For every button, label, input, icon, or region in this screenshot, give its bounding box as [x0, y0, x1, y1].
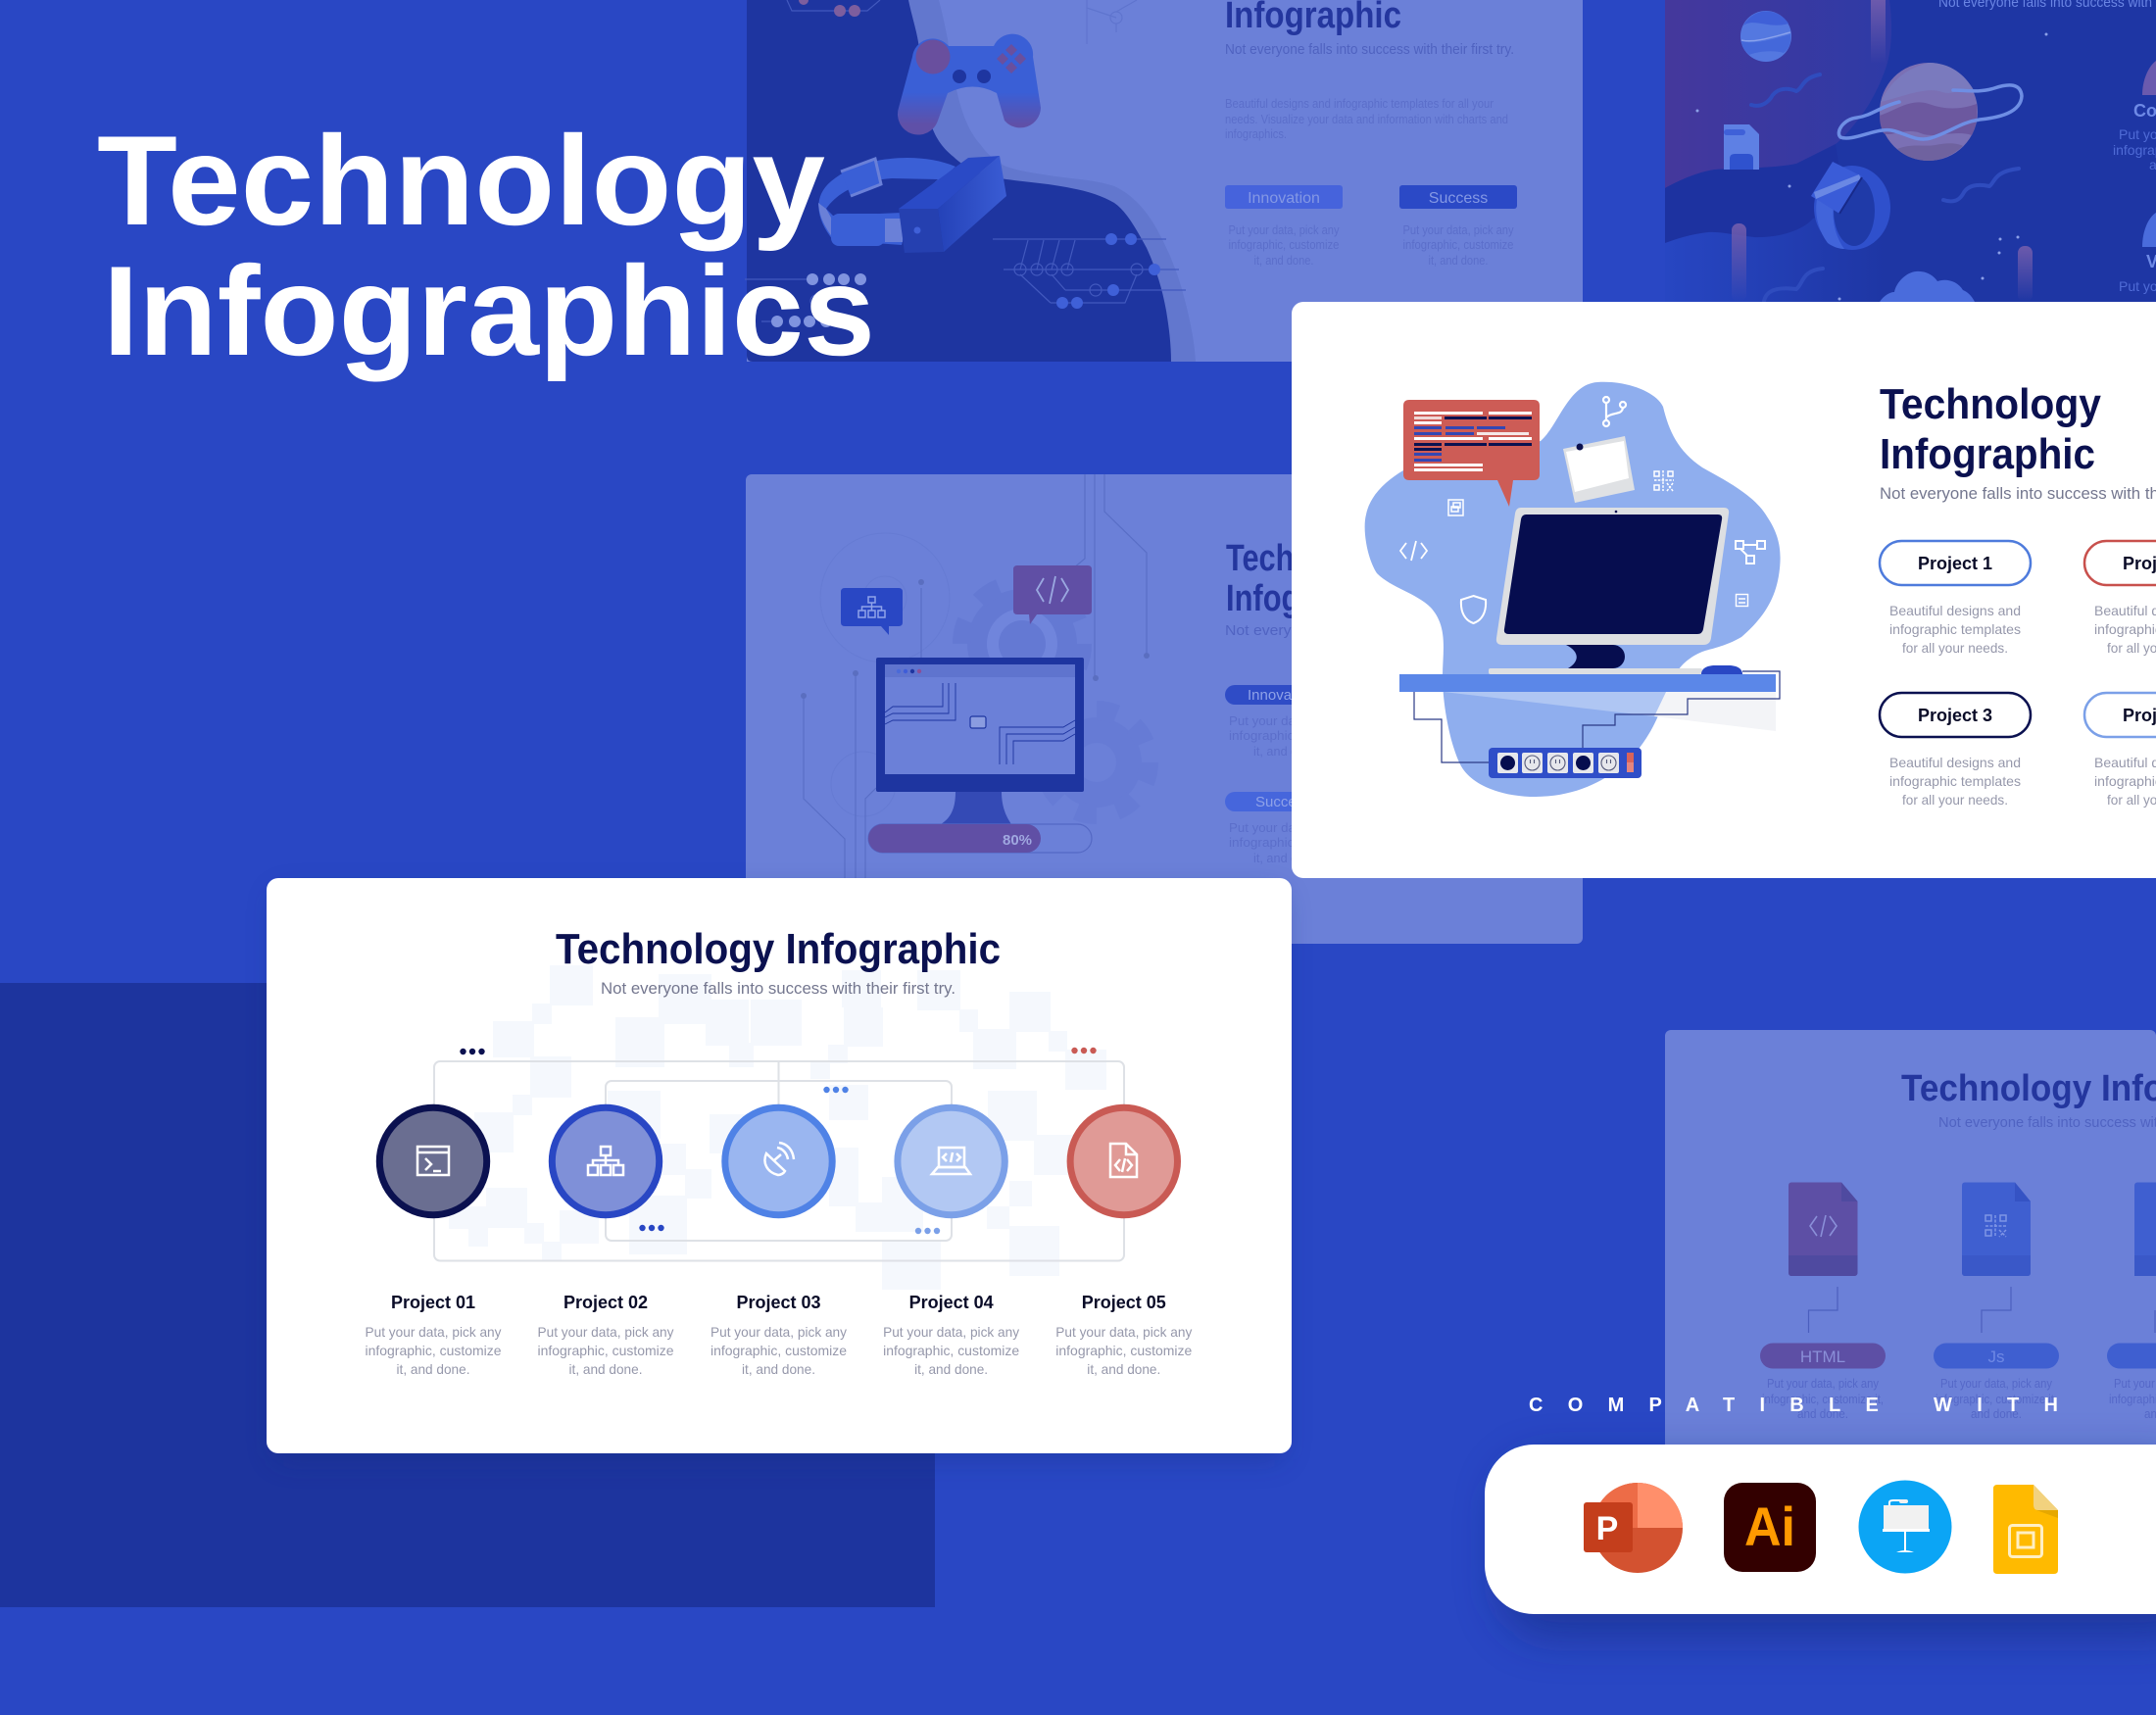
- column text: Put your data, pick any: [1767, 1376, 1879, 1391]
- column text: infographic, customize it,: [1762, 1392, 1884, 1406]
- column text: Put your data, pick any: [1403, 222, 1514, 237]
- compatible with label: COMPATIBLE WITH: [1529, 1395, 2058, 1416]
- faded text block: [1229, 820, 1362, 865]
- paragraph: [1225, 97, 1508, 141]
- pill: Project 4: [2084, 693, 2156, 737]
- dots: navy: [460, 1049, 485, 1054]
- text: Project 3: for all your needs.: [1902, 792, 2008, 808]
- speech bubble with code: [1403, 400, 1540, 507]
- icon: Keynote: [1858, 1480, 1952, 1574]
- pill: Project 1: [1880, 541, 2031, 585]
- blob: [1365, 382, 1781, 797]
- text: Project 3: [1889, 755, 2021, 808]
- subheading: Not everyone falls into success with their first try.: [601, 979, 956, 998]
- pill: Success: [1225, 792, 1352, 811]
- heading: Technology: [1226, 538, 1393, 579]
- text: Project 4: [2094, 755, 2156, 808]
- dark backdrop block: [0, 983, 935, 1607]
- dots: blue: [823, 1087, 849, 1093]
- icon: Js file: [1962, 1182, 2031, 1276]
- pill: HTML: HTML: [1800, 1348, 1845, 1366]
- icon: document: [1448, 500, 1463, 515]
- heading: Technology: [1880, 380, 2101, 428]
- circuit dots: [745, 0, 1186, 327]
- icon: floppy disk: [1724, 124, 1759, 170]
- label: Project 05: Project 05: [1082, 1293, 1166, 1312]
- icon: paper card and ring: [1811, 162, 1890, 250]
- icon: small planet: [1740, 11, 1791, 62]
- bars: [1732, 0, 2033, 302]
- label: Project 05: [1055, 1293, 1193, 1377]
- title: Infographics: [103, 239, 875, 382]
- text: Project 2: [2094, 603, 2156, 656]
- label: Project 01: it, and done.: [396, 1361, 470, 1377]
- pill: Innovation: [1225, 685, 1352, 705]
- lower wave: [1665, 144, 1842, 243]
- label: Project 05: infographic, customize: [1055, 1343, 1193, 1358]
- button: Success: [1399, 185, 1517, 209]
- progress bar 80%: 80%: [1003, 832, 1032, 849]
- icon: network: [1736, 541, 1765, 564]
- paragraph: Beautiful designs and infographic templates for all your: [1225, 97, 1494, 111]
- icon: cloud: [1880, 271, 1975, 302]
- text: Project 1: Beautiful designs and: [1889, 603, 2021, 618]
- label: Project 05: Put your data, pick any: [1055, 1324, 1192, 1340]
- person silhouette: [747, 0, 1171, 362]
- pill: HTML: [1760, 1343, 1886, 1368]
- circle: Project 04: [898, 1107, 1004, 1215]
- panel: faded file types slide: [1665, 1030, 2156, 1451]
- pill: Project 3: Project 3: [1918, 706, 1992, 725]
- label: Project 03: [710, 1293, 847, 1377]
- pill: Js: [1934, 1343, 2059, 1368]
- label: Project 01: infographic, customize: [365, 1343, 502, 1358]
- pill: third: [2107, 1343, 2156, 1368]
- label: Project 02: Project 02: [564, 1293, 648, 1312]
- desk: [1399, 674, 1776, 692]
- panel: faded gaming slide: [745, 0, 1583, 362]
- label: Project 04: [883, 1293, 1019, 1377]
- text: Project 1: [1889, 603, 2021, 656]
- desk shadow: [1444, 692, 1666, 716]
- wires: [1414, 671, 1780, 762]
- stars: [1695, 33, 2048, 300]
- lower glow: [1665, 201, 1960, 302]
- heading: Infographic: [1226, 578, 1391, 619]
- icon: big planet with ring: [1838, 63, 2022, 161]
- label: Project 02: it, and done.: [568, 1361, 643, 1377]
- icon: gamepad: [898, 34, 1041, 135]
- icon: smart band and VR device: [818, 156, 1006, 253]
- column text: infographic, customize: [1229, 237, 1339, 252]
- label: Project 04: Put your data, pick any: [883, 1324, 1019, 1340]
- heading: [1880, 380, 2101, 478]
- label: Project 02: [537, 1293, 674, 1377]
- label: Project 03: Project 03: [736, 1293, 821, 1312]
- icon: Illustrator: Ai: [1744, 1495, 1795, 1557]
- dots: light blue: [915, 1228, 940, 1234]
- monitor: [1489, 508, 1729, 674]
- column text: it, and done.: [1254, 253, 1313, 268]
- label: Project 02: infographic, customize: [537, 1343, 674, 1358]
- subheading: Not everyone falls into success with their first try.: [1225, 41, 1514, 58]
- faded text block: infographic, customize: [1229, 835, 1361, 850]
- pill: Innovation: Innovation: [1248, 687, 1315, 704]
- pill: Success: Success: [1255, 794, 1311, 810]
- button: Innovation: Innovation: [1248, 190, 1320, 207]
- circuit lines: [801, 474, 1150, 878]
- heading: [1226, 538, 1393, 619]
- monitor: [876, 658, 1084, 824]
- icon: shield: [1461, 596, 1486, 623]
- faded text block: [1229, 713, 1362, 759]
- text: Project 1: infographic templates: [1889, 621, 2021, 637]
- faded text block: Put your data, pick any: [1229, 713, 1362, 728]
- label: Project 01: [365, 1293, 502, 1377]
- label: Project 01: Project 01: [391, 1293, 475, 1312]
- panel: white card with five projects: [267, 878, 1292, 1453]
- icon: HTML file: [1788, 1182, 1858, 1276]
- icon: PowerPoint: [1584, 1483, 1683, 1573]
- panel: white card with computer: [1292, 302, 2156, 878]
- gear: main: [961, 583, 1083, 705]
- pill: Project 3: [1880, 693, 2031, 737]
- faded text block: it, and done.: [1253, 744, 1322, 759]
- faded icons at right: [2142, 61, 2156, 247]
- connectors: [1809, 1287, 2155, 1333]
- label: Project 04: infographic, customize: [883, 1343, 1019, 1358]
- outline gears: [820, 533, 950, 816]
- pill: Project 1: Project 1: [1918, 554, 1992, 573]
- icon: branch: [1603, 397, 1626, 426]
- illustration: computer on blob: [1365, 382, 1781, 797]
- column text: Put your data, pick any: [1229, 222, 1340, 237]
- label: Project 03: Put your data, pick any: [710, 1324, 847, 1340]
- label: Project 04: Project 04: [909, 1293, 994, 1312]
- label: Project 04: it, and done.: [914, 1361, 988, 1377]
- power strip: [1489, 748, 1642, 778]
- circle: Project 03: [725, 1107, 832, 1215]
- text: Project 1: for all your needs.: [1902, 640, 2008, 656]
- icon: chat bubble with org chart: [841, 588, 903, 635]
- circle: Project 02: [552, 1107, 660, 1215]
- card shadow: [274, 892, 1284, 1460]
- heading: Technology Infographic: [556, 925, 1001, 973]
- button: Innovation: [1225, 185, 1343, 209]
- column text: and done.: [1971, 1406, 2022, 1421]
- circle: Project 05: [1070, 1107, 1178, 1215]
- icon: pinned note: [1563, 436, 1635, 503]
- icon: QR code: [1654, 470, 1674, 491]
- icon: Google Slides: [1993, 1485, 2058, 1574]
- column text: Put your data, pick any: [1940, 1376, 2052, 1391]
- gear: lower: [1045, 710, 1149, 814]
- panel: faded monitor slide: [746, 474, 1583, 944]
- icon: code bubble: [1013, 565, 1092, 624]
- pill shadow: [1499, 1460, 2156, 1637]
- label: Project 01: Put your data, pick any: [365, 1324, 502, 1340]
- label: Project 05: it, and done.: [1087, 1361, 1160, 1377]
- faded text block: it, and done.: [1253, 851, 1322, 865]
- purple wave: [1665, 0, 1891, 188]
- column text: it, and done.: [1429, 253, 1488, 268]
- icon: list: [1737, 594, 1748, 606]
- column text: [1762, 1376, 2156, 1421]
- column text: infographic, customize: [1403, 237, 1513, 252]
- progress bar 80%: [868, 824, 1092, 853]
- icon: PowerPoint: P: [1596, 1510, 1618, 1547]
- dots: red: [1071, 1048, 1097, 1054]
- panel: compatibility pill: [1485, 1445, 2156, 1614]
- paragraph: needs. Visualize your data and information with charts and: [1225, 113, 1508, 126]
- icon: code brackets: [1400, 541, 1427, 561]
- icon: third file: [2134, 1182, 2156, 1276]
- mouse: [1701, 665, 1742, 674]
- icon: Illustrator: [1724, 1483, 1816, 1572]
- title: Technology: [97, 109, 825, 252]
- background squares: [449, 965, 1106, 1290]
- column text: and done.: [1797, 1406, 1848, 1421]
- heading: Infographic: [1880, 430, 2095, 478]
- subheading: Not everyone falls into success with their first try.: [1225, 622, 1558, 639]
- column text: [1229, 222, 1514, 268]
- text: Project 3: Beautiful designs and: [1889, 755, 2021, 770]
- label: Project 03: infographic, customize: [710, 1343, 847, 1358]
- dots: dark blue: [639, 1225, 664, 1231]
- silhouette band: [908, 0, 1196, 362]
- pill: Project 2: [2084, 541, 2156, 585]
- circle: Project 01: [379, 1107, 487, 1215]
- faded text block: Put your data, pick any: [1229, 820, 1362, 835]
- faded text block: infographic, customize: [1229, 728, 1361, 743]
- label: Project 03: it, and done.: [742, 1361, 815, 1377]
- pill: Js: Js: [1987, 1348, 2005, 1366]
- connector frames: [434, 1061, 1124, 1260]
- label: Project 02: Put your data, pick any: [537, 1324, 674, 1340]
- button: Success: Success: [1429, 190, 1488, 207]
- column text: infographic, customize it,: [1936, 1392, 2057, 1406]
- title: [97, 109, 875, 382]
- faded columns: [2113, 101, 2156, 294]
- icon: squiggles: [1751, 74, 2019, 301]
- paragraph: infographics.: [1225, 127, 1287, 141]
- panel: faded space slide: [1665, 0, 2156, 302]
- text: Project 3: infographic templates: [1889, 773, 2021, 789]
